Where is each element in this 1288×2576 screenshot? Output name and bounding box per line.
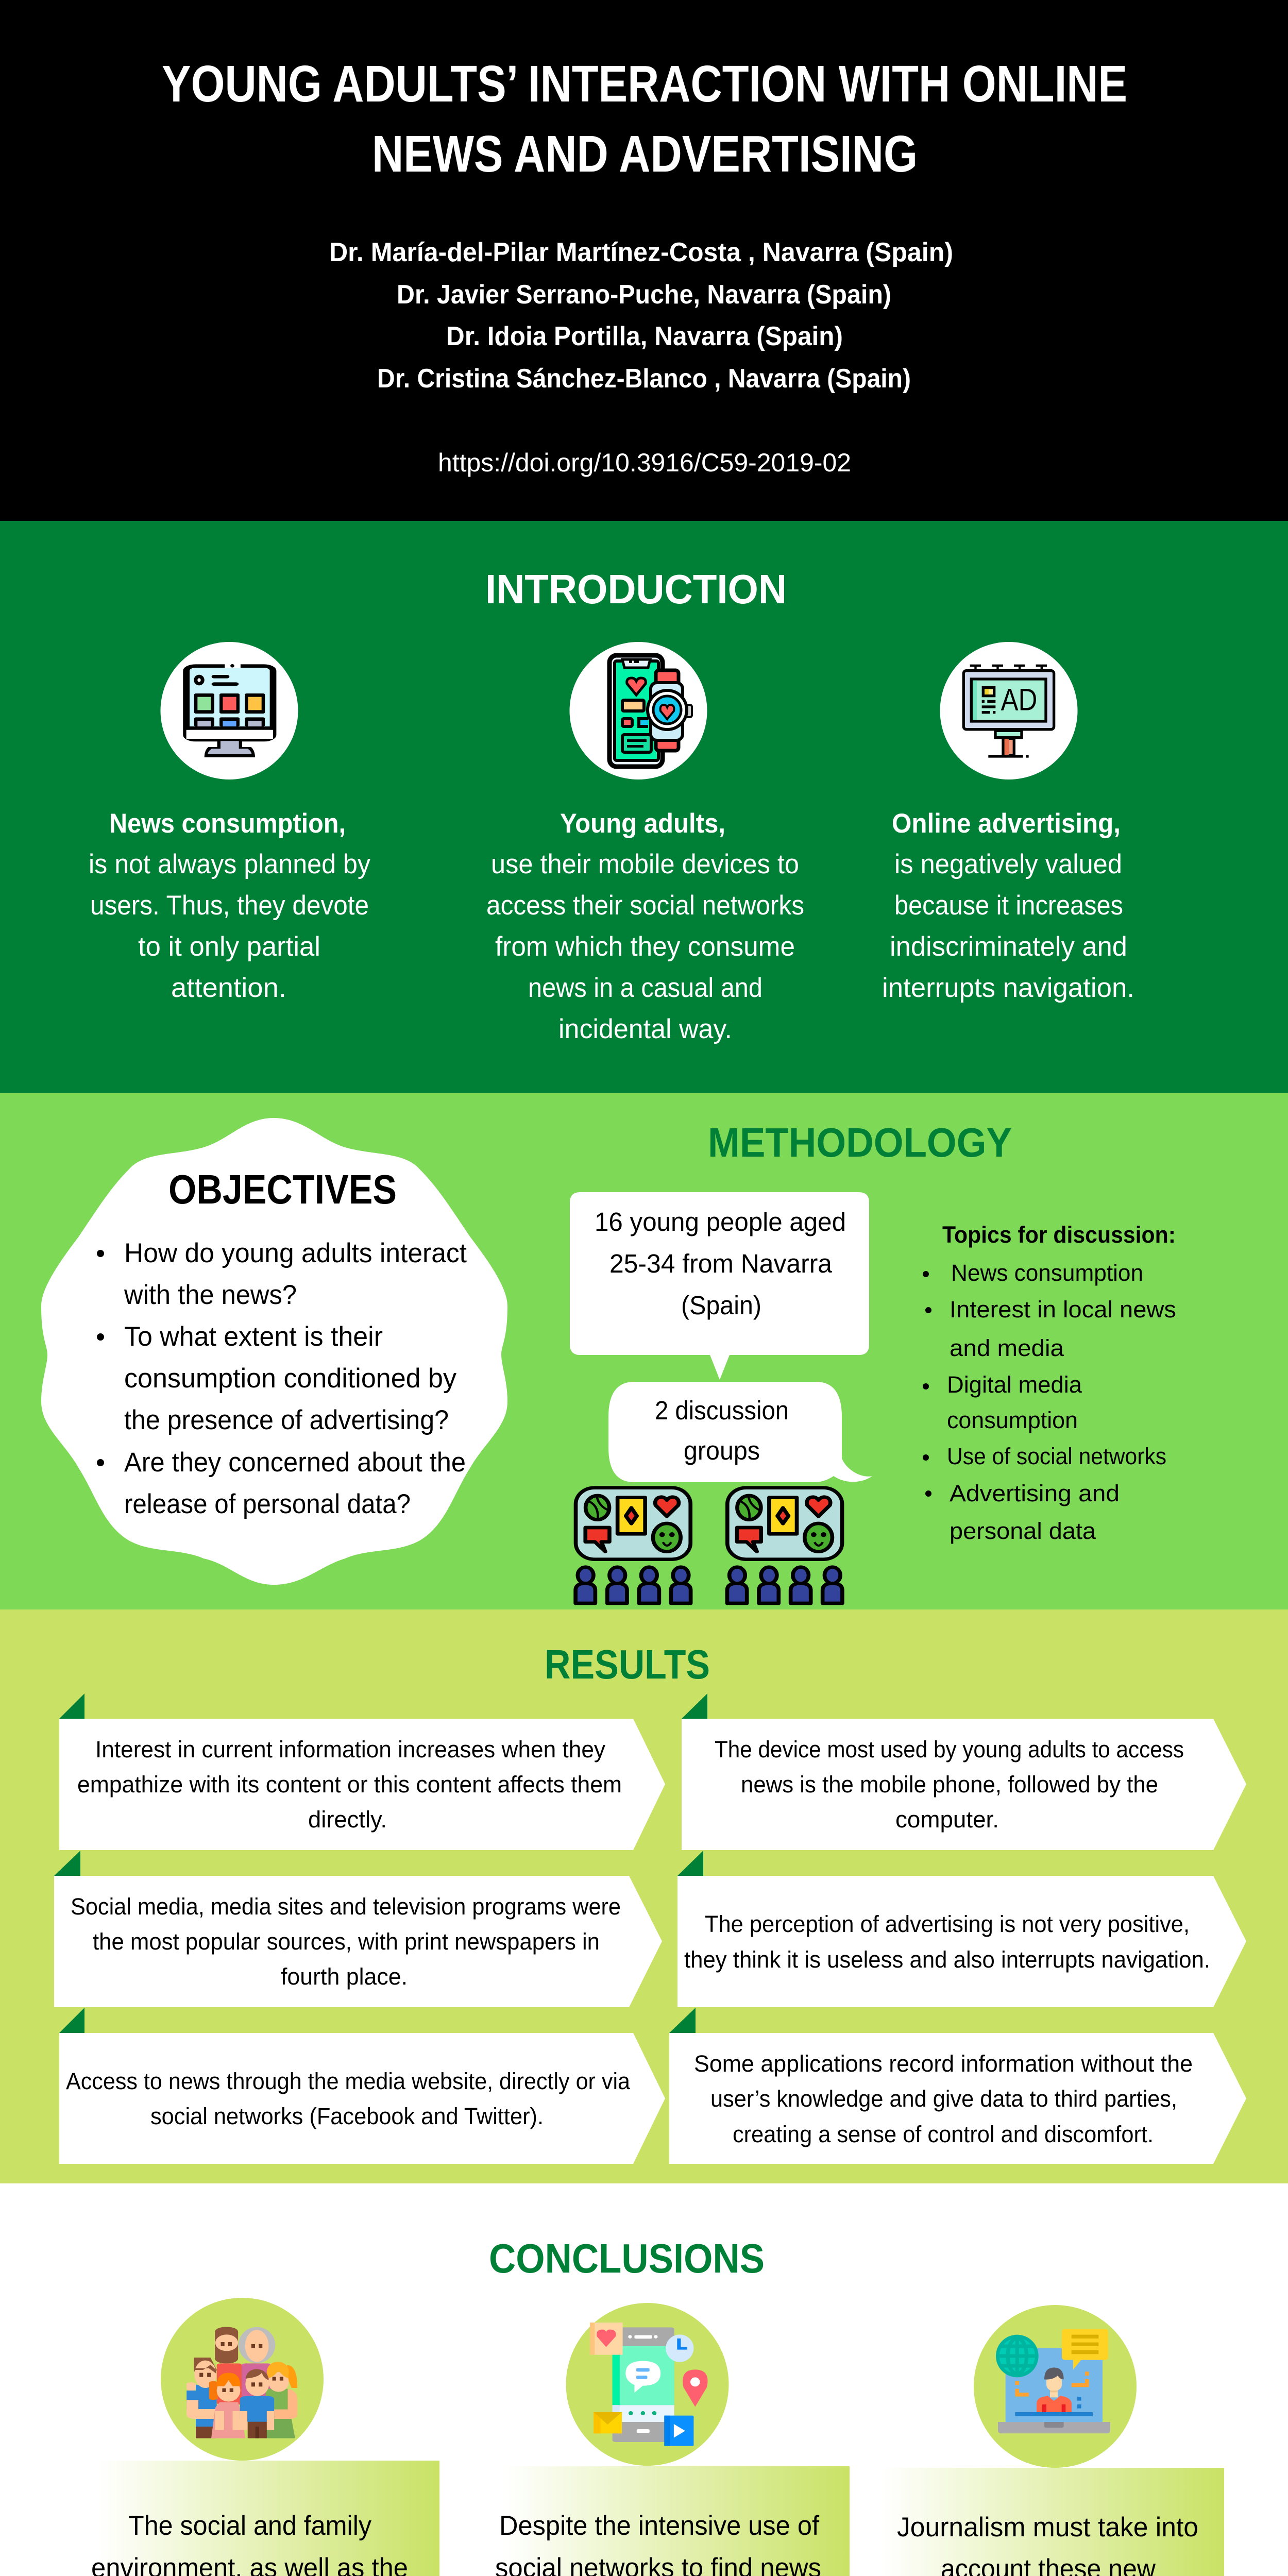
result card 4: The perception of advertising is not very positive, <box>705 1911 1190 1937</box>
icon: news monitor <box>161 642 298 779</box>
result card 1 <box>59 1693 665 1850</box>
title: NEWS AND ADVERTISING <box>372 125 918 183</box>
panel: conclusions <box>90 2235 1224 2576</box>
speech bubble: participants: 25-34 from Navarra <box>609 1249 833 1278</box>
result card 3 <box>54 1851 662 2007</box>
text: online advertising: because it increases <box>894 890 1123 921</box>
heading: conclusions: CONCLUSIONS <box>489 2235 765 2281</box>
text: online advertising: Online advertising, <box>892 808 1121 839</box>
list: objectives questions <box>97 1238 467 1519</box>
result card 1: directly. <box>308 1806 387 1833</box>
result card 1: Interest in current information increases when they <box>95 1736 605 1762</box>
text: news consumption <box>89 808 370 1003</box>
speech bubble: discussion groups: groups <box>684 1436 760 1465</box>
result card 4: they think it is useless and also interrupts navigation. <box>684 1946 1210 1973</box>
header panel <box>0 0 1288 521</box>
title: YOUNG ADULTS’ INTERACTION WITH ONLINE <box>162 55 1127 113</box>
panel: objectives and methodology <box>0 1093 1288 1609</box>
heading: methodology: METHODOLOGY <box>708 1120 1012 1165</box>
list: topics for discussion: Use of social networks <box>947 1443 1166 1469</box>
authors <box>329 238 953 394</box>
list: topics for discussion: News consumption <box>951 1260 1143 1286</box>
text: young adults <box>486 808 804 1044</box>
text: young adults: use their mobile devices to <box>491 849 799 879</box>
panel: results <box>0 1609 1288 2183</box>
list: topics for discussion: consumption <box>947 1407 1078 1433</box>
authors: Dr. María-del-Pilar Martínez-Costa , Navarra (Spain) <box>329 238 953 267</box>
speech bubble: discussion groups: 2 discussion <box>655 1396 789 1425</box>
authors: Dr. Cristina Sánchez-Blanco , Navarra (Spain) <box>377 364 911 394</box>
result card 3: Social media, media sites and television programs were <box>71 1893 621 1920</box>
conclusion panel 1 <box>90 2461 439 2576</box>
result card 2: The device most used by young adults to access <box>715 1736 1184 1762</box>
result card 1: empathize with its content or this content affects them <box>77 1771 622 1798</box>
result card 5 <box>59 2008 665 2164</box>
panel: introduction <box>0 521 1288 1093</box>
list: objectives questions: Are they concerned about the <box>124 1447 466 1478</box>
authors: Dr. Idoia Portilla, Navarra (Spain) <box>446 321 843 351</box>
DOI link: https://doi.org/10.3916/C59-2019-02 <box>438 448 851 477</box>
result card 4 <box>677 1851 1246 2007</box>
panel: objectives blob <box>41 1118 507 1585</box>
conclusion panel 3 <box>882 2468 1224 2576</box>
list: objectives questions: consumption conditioned by <box>124 1363 456 1394</box>
result card 5: social networks (Facebook and Twitter). <box>150 2103 544 2129</box>
text: news consumption: to it only partial <box>138 931 320 962</box>
text: young adults: news in a casual and <box>528 973 762 1003</box>
list: topics for discussion: Interest in local news <box>950 1296 1176 1323</box>
result card 2 <box>682 1693 1246 1850</box>
conclusion panel 3: Journalism must take into <box>897 2512 1198 2543</box>
speech bubble: participants <box>570 1192 869 1380</box>
text: online advertising: indiscriminately and <box>890 931 1127 962</box>
result card 2: computer. <box>895 1806 999 1833</box>
list: topics for discussion: Advertising and <box>950 1480 1120 1506</box>
authors: Dr. Javier Serrano-Puche, Navarra (Spain) <box>397 280 891 310</box>
result card 3: the most popular sources, with print newspapers in <box>93 1928 600 1955</box>
list: objectives questions: with the news? <box>124 1280 297 1310</box>
text: online advertising: is negatively valued <box>894 849 1122 879</box>
heading: introduction: INTRODUCTION <box>485 566 787 612</box>
conclusion panel 2 <box>493 2466 850 2576</box>
list: objectives questions: To what extent is their <box>124 1321 383 1352</box>
speech bubble: discussion groups <box>608 1382 872 1482</box>
list: topics for discussion: Digital media <box>947 1371 1082 1398</box>
text: news consumption: attention. <box>171 973 286 1003</box>
text: young adults: access their social networks <box>486 890 804 921</box>
icon: phone and smartwatch <box>570 642 707 779</box>
text: young adults: incidental way. <box>558 1014 732 1044</box>
result card 3: fourth place. <box>281 1963 408 1990</box>
speech bubble: participants: 16 young people aged <box>595 1207 846 1236</box>
list: topics for discussion <box>923 1222 1176 1544</box>
result card 6 <box>669 2008 1246 2164</box>
text: news consumption: users. Thus, they devote <box>90 890 369 921</box>
list: topics for discussion: and media <box>950 1335 1064 1361</box>
icon: two discussion group boards with people <box>575 1488 842 1603</box>
text: online advertising: interrupts navigation. <box>882 973 1134 1003</box>
icon: journalist on laptop with globe <box>974 2305 1137 2468</box>
heading: results: RESULTS <box>545 1641 710 1687</box>
conclusion panel 2: Despite the intensive use of <box>499 2511 819 2541</box>
text: news consumption: is not always planned by <box>89 849 370 879</box>
result card 6: Some applications record information without the <box>694 2050 1193 2077</box>
list: objectives questions: the presence of advertising? <box>124 1405 449 1435</box>
icon label: AD: AD <box>1001 683 1037 717</box>
text: young adults: from which they consume <box>495 931 795 962</box>
heading: objectives: OBJECTIVES <box>168 1166 397 1212</box>
icon: advertising billboard <box>940 642 1078 779</box>
result card 2: news is the mobile phone, followed by the <box>741 1771 1158 1798</box>
list: objectives questions: How do young adults interact <box>124 1238 467 1268</box>
result card 5: Access to news through the media website, directly or via <box>66 2068 631 2094</box>
text: young adults: Young adults, <box>560 808 725 839</box>
title <box>162 55 1127 183</box>
text: news consumption: News consumption, <box>109 808 346 839</box>
result card 6: user’s knowledge and give data to third parties, <box>710 2086 1177 2112</box>
conclusion panel 1: The social and family <box>128 2511 371 2541</box>
icon: phone with social apps <box>566 2303 728 2466</box>
result card 6: creating a sense of control and discomfort. <box>733 2121 1154 2147</box>
icon: family group <box>161 2298 324 2461</box>
list: topics for discussion: personal data <box>950 1518 1096 1544</box>
list: objectives questions: release of personal data? <box>124 1489 411 1519</box>
speech bubble: participants: (Spain) <box>681 1291 761 1320</box>
text: online advertising <box>882 808 1134 1003</box>
list: topics for discussion: Topics for discussion: <box>942 1222 1176 1248</box>
